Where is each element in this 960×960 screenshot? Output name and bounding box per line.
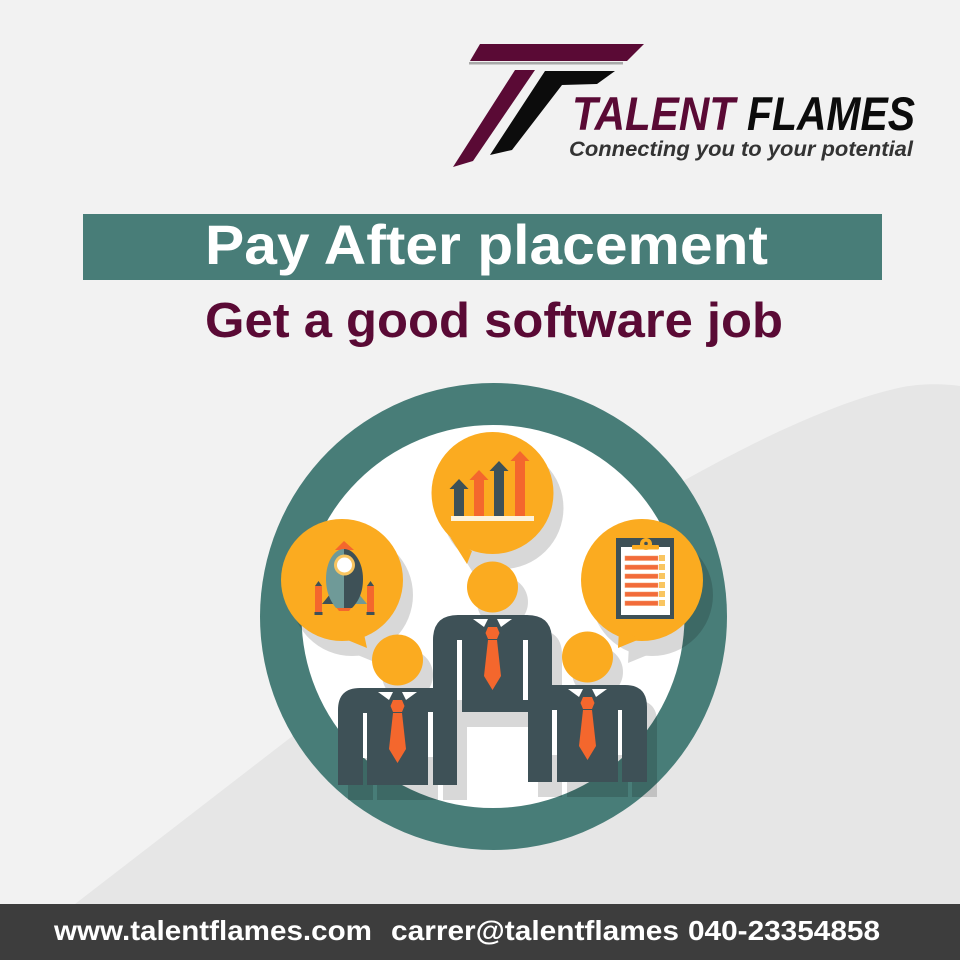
title banner: Pay After placement [83, 213, 882, 280]
footer contact bar: www.talentflames.com [53, 915, 372, 946]
drop shadows [291, 447, 713, 800]
footer contact bar: 040-23354858 [688, 915, 880, 946]
icon: rising arrows chart [450, 451, 534, 521]
speech bubble: growth chart [432, 432, 554, 564]
people [338, 562, 647, 785]
illustration: teal ring with team [260, 383, 727, 850]
title banner: Pay After placement: Pay After placement [205, 213, 768, 276]
person: right [528, 632, 647, 782]
ring [260, 383, 727, 850]
footer contact bar [0, 904, 960, 960]
person: top [433, 562, 552, 712]
icon: clipboard [616, 538, 674, 619]
logo: Talent Flames: FLAMES [747, 87, 915, 140]
logo: Talent Flames: TALENT [572, 87, 739, 140]
subtitle: Get a good software job [205, 294, 783, 348]
logo: Talent Flames: Connecting you to your potential [569, 138, 914, 161]
icon: rocket [314, 541, 374, 615]
footer contact bar: carrer@talentflames [391, 915, 679, 946]
speech bubble: rocket [281, 519, 403, 648]
logo: Talent Flames [453, 44, 915, 167]
person: left [338, 634, 457, 785]
speech bubble: checklist [581, 519, 703, 648]
